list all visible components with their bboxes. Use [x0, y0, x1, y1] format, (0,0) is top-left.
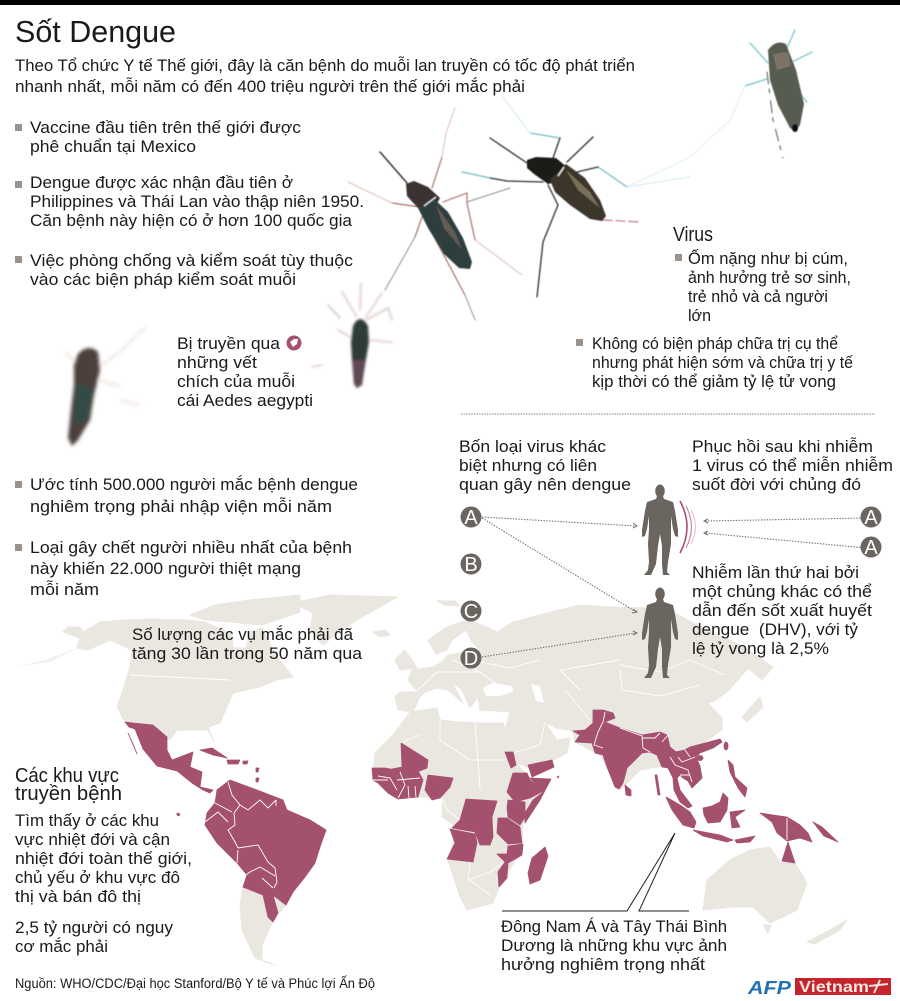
badge A: A [464, 507, 478, 529]
Asia and Pacific [573, 710, 838, 863]
bullet: prevention: vào các biện pháp kiểm soát muỗi [30, 270, 296, 289]
virus treatment: kịp thời có thể giảm tỷ lệ tử vong [592, 372, 836, 391]
bullet: deaths: này khiến 22.000 người thiệt mạng [30, 559, 301, 578]
bullet: prevention: Việc phòng chống và kiểm soát tùy thuộc [30, 251, 354, 270]
transmission text: cái Aedes aegypti [177, 391, 313, 410]
transmission areas heading: Các khu vực [15, 765, 119, 787]
Americas [125, 722, 326, 922]
source: Nguồn: WHO/CDC/Đại học Stanford/Bộ Y tế và Phúc lợi Ấn Độ [15, 976, 375, 991]
bullet: hospitalisation: nghiêm trọng phải nhập viện mỗi năm [30, 497, 332, 516]
top bar [0, 0, 900, 5]
bullet: hospitalisation [15, 475, 358, 516]
transmission areas text: vực nhiệt đới và cận [15, 830, 170, 849]
virus symptoms: Ốm nặng như bị cúm, [688, 248, 848, 268]
virus treatment: nhưng phát hiện sớm và chữa trị y tế [592, 353, 854, 372]
intro text [15, 56, 635, 96]
recovery text: Phục hồi sau khi nhiễm [692, 437, 873, 456]
second infection text: dẫn đến sốt xuất huyết [692, 601, 872, 620]
virus symptoms [675, 248, 851, 325]
intro text: Theo Tổ chức Y tế Thế giới, đây là căn bệnh do muỗi lan truyền có tốc độ phát triển [15, 56, 635, 75]
transmission areas text: Tìm thấy ở các khu [15, 811, 159, 830]
four virus types text [459, 437, 631, 494]
transmission areas heading: truyền bệnh [15, 783, 122, 805]
virus symptoms: ảnh hưởng trẻ sơ sinh, [688, 268, 851, 287]
callout text: Đông Nam Á và Tây Thái Bình [501, 917, 727, 936]
badge C: C [464, 601, 478, 623]
virus heading: Virus [673, 224, 713, 246]
recovery text [692, 437, 893, 494]
bullet: vaccine: phê chuẩn tại Mexico [30, 137, 196, 156]
transmission areas text: chủ yếu ở khu vực đô [15, 868, 180, 887]
badge A right bottom [860, 536, 882, 559]
second infection text: lệ tỷ vong là 2,5% [692, 639, 829, 658]
cases growth text: tăng 30 lần trong 50 năm qua [132, 644, 363, 663]
bullet: hospitalisation: Ước tính 500.000 người mắc bệnh dengue [30, 475, 358, 494]
badge C [460, 600, 482, 623]
transmission text: chích của muỗi [177, 372, 295, 391]
transmission areas heading [15, 765, 122, 805]
bullet: deaths [15, 538, 352, 599]
transmission text [177, 334, 313, 410]
transmission areas text: nhiệt đới toàn thế giới, [15, 849, 192, 868]
icon: bite marker [286, 336, 302, 350]
bullet: deaths: Loại gây chết người nhiều nhất của bệnh [30, 538, 352, 557]
badge A right top: A [864, 507, 878, 529]
recovery text: suốt đời với chủng đó [692, 475, 861, 494]
badge D [460, 648, 482, 670]
badge A right bottom: A [864, 537, 878, 559]
transmission areas text [15, 811, 192, 906]
bullet: first confirmed: Philippines và Thái Lan vào thập niên 1950. [30, 192, 364, 211]
logo: AFP: AFP [747, 978, 792, 998]
human figure immune [642, 484, 678, 575]
mosquito top right [627, 30, 812, 187]
land masses [15, 595, 847, 965]
transmission text: Bị truyền qua [177, 334, 281, 353]
four virus types text: biệt nhưng có liên [459, 456, 597, 475]
bullet: vaccine: Vaccine đầu tiên trên thế giới được [30, 118, 301, 137]
transmission areas text: thị và bán đô thị [15, 887, 141, 906]
world map [15, 595, 847, 965]
callout text [501, 917, 727, 974]
second infection text: Nhiễm lần thứ hai bởi [692, 563, 859, 582]
mosquito centre small [312, 283, 392, 388]
bullet: deaths: mỗi năm [30, 580, 99, 599]
at risk text: cơ mắc phải [15, 937, 108, 956]
virus treatment: Không có biện pháp chữa trị cụ thể [592, 334, 838, 353]
land borders [130, 660, 725, 895]
callout lines [502, 833, 689, 911]
Africa and Arabia [372, 743, 559, 887]
human figure second infection [642, 588, 678, 678]
mosquito left blurred [65, 327, 146, 446]
logo: Vietnam+ [795, 978, 891, 996]
badge A [460, 506, 482, 529]
second infection text: dengue (DHV), với tỷ [692, 620, 858, 639]
bullet: first confirmed [15, 173, 364, 230]
bullet: first confirmed: Dengue được xác nhận đầu tiên ở [30, 173, 293, 192]
second infection text [692, 563, 872, 658]
bullet: prevention [15, 251, 354, 289]
endemic regions [125, 710, 838, 922]
at risk text [15, 918, 174, 956]
virus symptoms: trẻ nhỏ và cả người [688, 287, 828, 306]
four virus types text: Bốn loại virus khác [459, 437, 607, 456]
bullet: vaccine [15, 118, 301, 156]
four virus types text: quan gây nên dengue [459, 475, 631, 494]
immunity arcs [680, 501, 696, 553]
intro text: nhanh nhất, mỗi năm có đến 400 triệu người trên thế giới mắc phải [15, 77, 525, 96]
mosquito left large [348, 108, 522, 320]
virus symptoms: lớn [688, 306, 711, 325]
bullet: first confirmed: Căn bệnh này hiện có ở hơn 100 quốc gia [30, 211, 353, 230]
cases growth text: Số lượng các vụ mắc phải đã [132, 625, 354, 644]
second infection text: một chủng khác có thể [692, 582, 872, 601]
callout text: hưởng nghiêm trọng nhất [501, 955, 705, 974]
badge B: B [464, 554, 478, 576]
logo: Vietnam+: Vietnam [799, 979, 869, 996]
badge D: D [464, 648, 478, 670]
callout text: Dương là những khu vực ảnh [501, 936, 727, 955]
badge B [460, 554, 482, 576]
recovery text: 1 virus có thể miễn nhiễm [692, 456, 893, 475]
virus treatment [576, 334, 854, 391]
mosquito centre [462, 97, 690, 297]
virus badges [460, 506, 882, 670]
title: Sốt Dengue [15, 14, 176, 49]
transmission text: những vết [177, 353, 257, 372]
badge A right top [860, 506, 882, 529]
at risk text: 2,5 tỷ người có nguy [15, 918, 174, 937]
cases growth text [132, 625, 363, 663]
arrows between virus types and figures [482, 517, 866, 657]
